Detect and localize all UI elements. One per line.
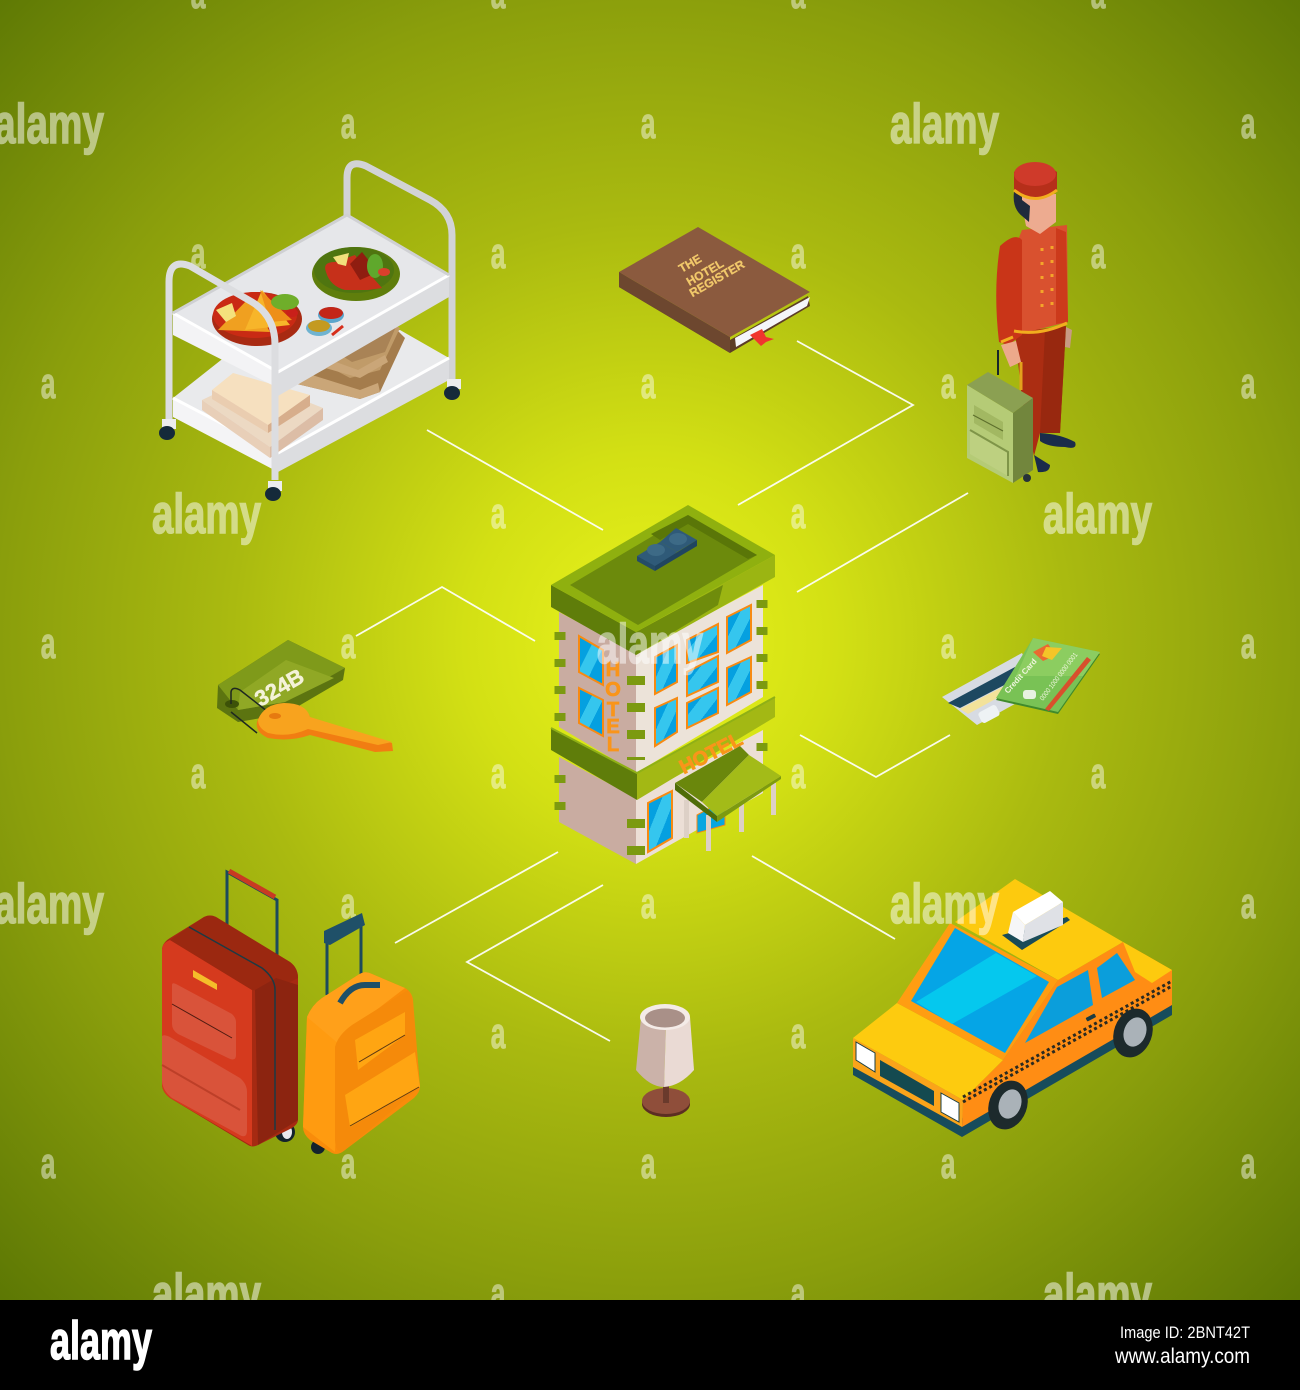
taxi headlights: [856, 1042, 875, 1072]
watermark: alamy logos: alamy: [152, 482, 261, 545]
front wheel: [982, 1075, 1034, 1135]
connector lines: [356, 341, 968, 1041]
corner bumps: [627, 676, 645, 860]
small watermark marks: aaaa: [191, 748, 1106, 798]
watermark: alamy logos: alamy: [890, 872, 999, 935]
orange suitcase grip: [340, 985, 380, 1003]
bellboy shoes: [1040, 433, 1076, 448]
watermark: alamy logos: alamy: [890, 92, 999, 155]
awning: [675, 746, 781, 822]
taxi underbody: [853, 1000, 1172, 1137]
taxi front panel: [853, 1038, 963, 1127]
upper left wall: [559, 612, 636, 773]
vertical hotel sign: E: [606, 716, 620, 738]
checker stripe: [963, 981, 1172, 1102]
awning pillars: [684, 783, 776, 851]
plate with chicken: [312, 247, 400, 301]
book title: HOTEL: [684, 256, 726, 289]
small watermark marks: aa: [491, 1268, 806, 1318]
footer bar: [0, 1300, 1300, 1390]
plate with samosas: [212, 290, 302, 346]
taxi side panel: [962, 942, 1172, 1127]
hotel door behind awning: [697, 800, 725, 833]
bellboy head: [1020, 194, 1056, 234]
watermark: alamy logos: [0, 92, 1152, 1325]
red suitcase handle: [227, 872, 277, 955]
small watermark marks: aa: [491, 488, 806, 538]
small watermark marks: aaaa: [191, 1008, 1106, 1058]
small watermark marks: aaa: [341, 98, 1256, 148]
side windows: [1025, 970, 1093, 1043]
book title: REGISTER: [687, 257, 747, 300]
cart back handle: [347, 164, 452, 380]
taxi grille: [880, 1060, 934, 1106]
cart front handle: [169, 264, 275, 480]
footer image id: Image ID: 2BNT42T: [1120, 1323, 1250, 1342]
windshield: [897, 923, 1058, 1060]
watermark: alamy logos: alamy: [1043, 482, 1152, 545]
key: [257, 705, 393, 752]
front hotel sign: HOTEL: [676, 728, 746, 779]
left wall windows: [579, 636, 603, 736]
icon: suitcases: [162, 871, 420, 1154]
vertical hotel sign: T: [607, 699, 619, 721]
middle band: [551, 728, 637, 800]
rooftop AC units: [637, 528, 697, 571]
taxi roof sign: [1002, 891, 1070, 950]
vertical hotel sign: O: [605, 679, 621, 701]
small watermark marks: aaaaa: [41, 358, 1256, 408]
watermark: alamy logos: alamy: [1043, 1262, 1152, 1325]
icon: room service cart: [159, 164, 461, 501]
door handle: [1086, 1013, 1096, 1022]
orange suitcase body: [303, 972, 420, 1154]
bookmark: [750, 329, 774, 346]
watermark: alamy logos: alamy: [152, 1262, 261, 1325]
watermark: alamy logos: alamy: [597, 612, 703, 675]
footer url: www.alamy.com: [1114, 1345, 1250, 1368]
small watermark marks: aaaa: [191, 228, 1106, 278]
orange suitcase wheel: [311, 1140, 325, 1154]
footer logo: alamy: [50, 1311, 152, 1371]
icon: taxi car: [853, 879, 1172, 1137]
vertical hotel sign: L: [607, 734, 619, 756]
icon: credit cards: [942, 638, 1100, 725]
boxes on bottom tray: [202, 373, 323, 458]
icon: room key with tag: [217, 640, 393, 752]
roof band: [551, 585, 636, 655]
vertical hotel sign: H: [606, 659, 620, 681]
silver card: [942, 653, 1040, 725]
taxi hood: [853, 1003, 1003, 1100]
green card: [996, 640, 1100, 714]
upper right wall: [636, 585, 763, 773]
bellboy jacket: [1015, 225, 1068, 335]
right wall windows: [648, 605, 751, 852]
bellboy hands: [1001, 341, 1021, 367]
icon: hotel building: [551, 505, 781, 864]
rear wheel: [1107, 1003, 1159, 1063]
book title: THE: [676, 251, 704, 276]
lower left wall: [559, 757, 636, 864]
key tag: [217, 640, 345, 722]
icon: table lamp: [636, 1004, 694, 1117]
cart top tray: [173, 215, 449, 396]
tag number: 324B: [250, 664, 308, 711]
green suitcase: [967, 350, 1033, 483]
icon: hotel register book: [619, 227, 810, 353]
small watermark marks: aaa: [341, 878, 1256, 928]
cart wheels: [159, 379, 461, 501]
lower right wall: [636, 730, 763, 864]
sauce bowls: [306, 307, 344, 336]
card labels: Credit Card: [1003, 657, 1039, 695]
orange suitcase handle: [327, 925, 361, 995]
taxi roof and trunk: [955, 879, 1123, 980]
red suitcase body: [162, 916, 298, 1146]
roof top: [551, 505, 775, 632]
vertical hotel sign: [605, 659, 621, 756]
small watermark marks: aaaa: [41, 618, 1256, 668]
icon: credit cards: 0000 1000 0000 0001: [1039, 652, 1080, 702]
bellboy trousers: [1015, 326, 1066, 456]
jacket buttons: [1042, 246, 1052, 318]
red suitcase wheel: [275, 1122, 295, 1142]
small watermark marks: aaaaa: [41, 1138, 1256, 1188]
cart bottom tray: [173, 330, 449, 472]
pizza boxes: [297, 322, 405, 399]
bellboy hat: [1014, 164, 1057, 198]
icon: bellboy with green suitcase: [967, 162, 1076, 483]
